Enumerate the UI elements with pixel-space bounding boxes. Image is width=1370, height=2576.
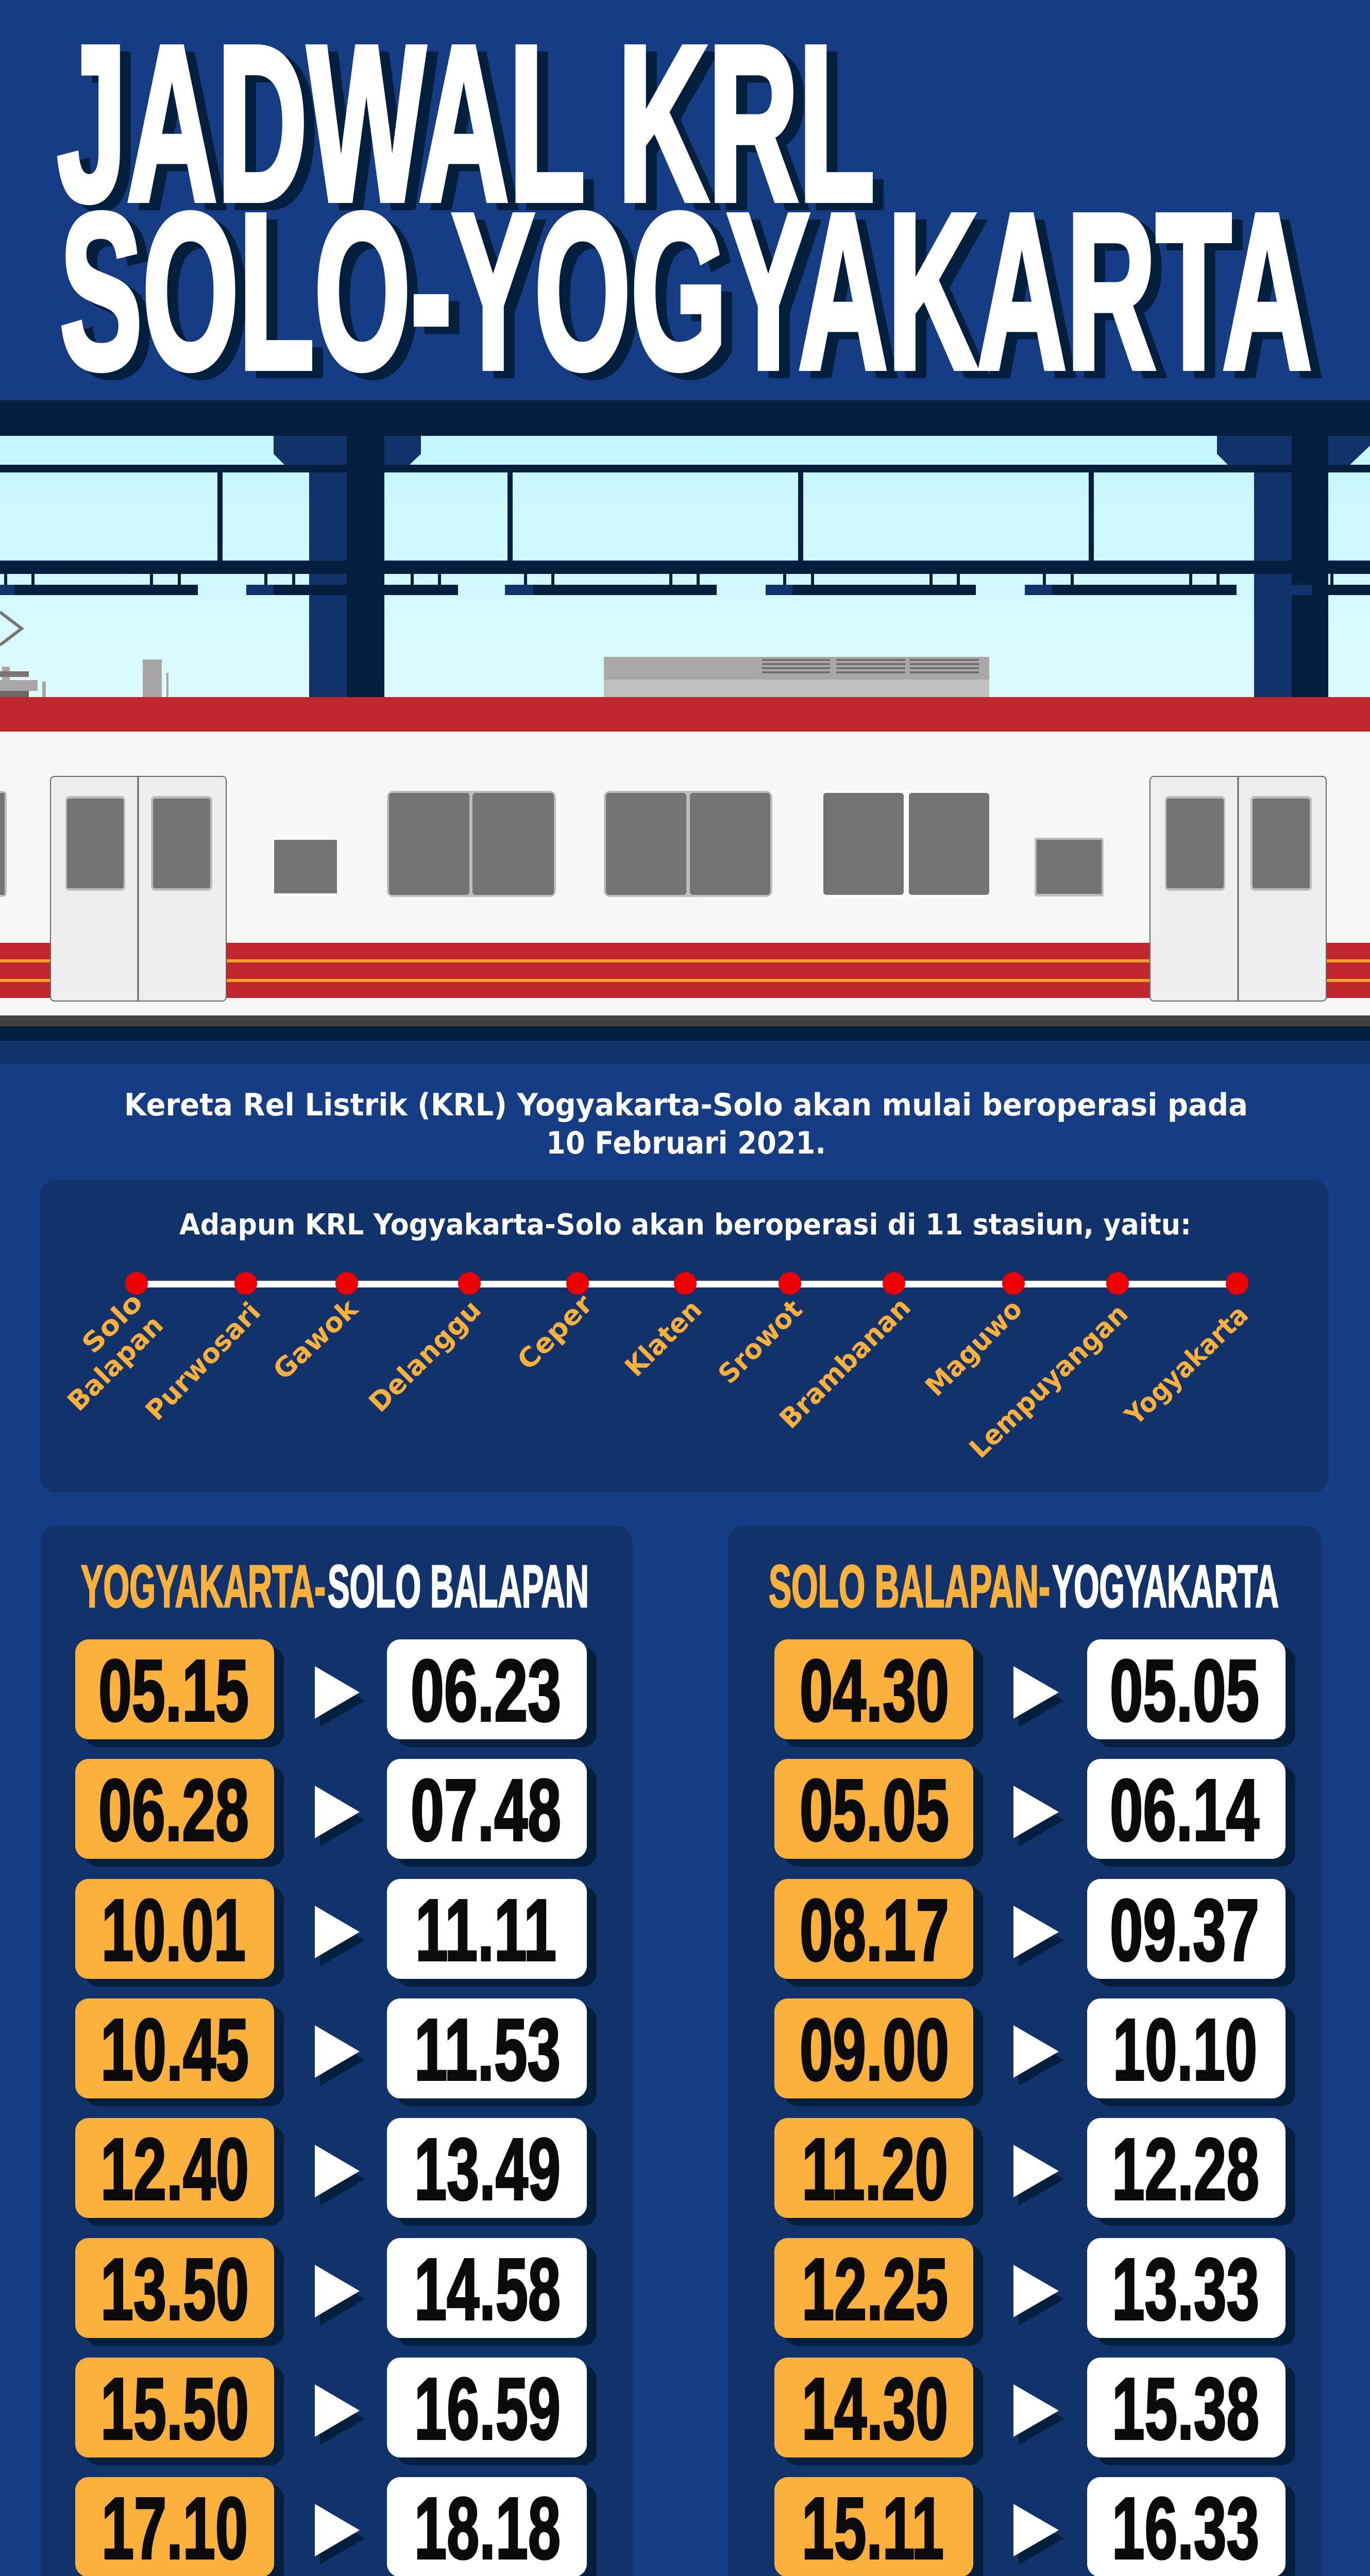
- panel: Yogyakarta to Solo Balapan: [41, 1526, 633, 2576]
- train body: [0, 697, 1370, 1063]
- panel: stations: [40, 1180, 1328, 1493]
- row 05.15 to 06.23: [75, 1639, 597, 1747]
- panel: Solo Balapan to Yogyakarta: [728, 1526, 1321, 2576]
- row 05.15 to 06.23: 05.15: [98, 1642, 249, 1740]
- row 15.50 to 16.59: 16.59: [414, 2360, 561, 2458]
- row 09.00 to 10.10: 09.00: [800, 2001, 949, 2099]
- row 12.40 to 13.49: 12.40: [100, 2121, 249, 2218]
- station labels: Yogyakarta: [1119, 1299, 1255, 1432]
- row 11.20 to 12.28: [774, 2118, 1295, 2226]
- row 04.30 to 05.05: [774, 1639, 1295, 1747]
- row 13.50 to 14.58: 13.50: [100, 2241, 249, 2338]
- station labels: Gawok: [267, 1293, 364, 1386]
- station dots: [125, 1272, 1248, 1295]
- background buildings: [0, 612, 989, 697]
- row 12.40 to 13.49: [75, 2118, 597, 2226]
- row 17.10 to 18.18: 17.10: [102, 2480, 248, 2576]
- row 06.28 to 07.48: 06.28: [98, 1761, 249, 1859]
- row 08.17 to 09.37: 08.17: [800, 1882, 949, 1979]
- station labels: Purwosari: [140, 1297, 267, 1427]
- row 10.45 to 11.53: 11.53: [414, 2001, 561, 2099]
- row 17.10 to 18.18: 18.18: [414, 2480, 561, 2576]
- station labels: Delanggu: [363, 1294, 487, 1418]
- row 14.30 to 15.38: 15.38: [1112, 2360, 1259, 2458]
- heading: Yogyakarta-Solo Balapan: YOGYAKARTA-: [81, 1553, 326, 1620]
- row 12.25 to 13.33: 12.25: [802, 2241, 948, 2338]
- row 13.50 to 14.58: [75, 2238, 597, 2346]
- row 08.17 to 09.37: [774, 1879, 1295, 1987]
- row 15.50 to 16.59: [75, 2358, 597, 2465]
- station labels: Ceper: [512, 1289, 599, 1376]
- columns and beams: [0, 436, 1370, 697]
- row 10.01 to 11.11: [75, 1879, 597, 1987]
- intro text: [124, 1087, 1248, 1161]
- stations heading: Adapun KRL Yogyakarta-Solo akan beroperasi di 11 stasiun, yaitu:: [179, 1208, 1191, 1242]
- row 12.25 to 13.33: 13.33: [1112, 2241, 1259, 2338]
- row 17.10 to 18.18: [75, 2477, 597, 2576]
- station labels: [62, 1287, 1255, 1464]
- row 15.11 to 16.33: [774, 2477, 1295, 2576]
- illustration: station and train: [0, 400, 1370, 1063]
- sky: [0, 436, 1370, 697]
- station labels: Maguwo: [920, 1294, 1028, 1402]
- station labels: Srowot: [713, 1294, 808, 1390]
- station labels: Klaten: [619, 1294, 708, 1383]
- row 10.01 to 11.11: 10.01: [102, 1882, 246, 1979]
- row 10.45 to 11.53: [75, 1998, 597, 2106]
- row 15.11 to 16.33: 15.11: [802, 2480, 944, 2576]
- row 10.45 to 11.53: 10.45: [100, 2001, 249, 2099]
- station labels: Brambanan: [774, 1292, 917, 1435]
- row 09.00 to 10.10: [774, 1998, 1295, 2106]
- train windows: [0, 791, 1104, 897]
- route line: [137, 1281, 1237, 1287]
- train door right: [1150, 776, 1326, 1001]
- intro text: Kereta Rel Listrik (KRL) Yogyakarta-Solo akan mulai beroperasi pada: [124, 1087, 1248, 1123]
- row 05.15 to 06.23: 06.23: [411, 1642, 561, 1740]
- heading: Yogyakarta-Solo Balapan: SOLO BALAPAN: [328, 1553, 589, 1620]
- row 10.01 to 11.11: 11.11: [415, 1882, 556, 1979]
- row 09.00 to 10.10: 10.10: [1113, 2001, 1257, 2099]
- row 04.30 to 05.05: 05.05: [1110, 1642, 1259, 1740]
- row 15.50 to 16.59: 15.50: [100, 2360, 249, 2458]
- station roof band: [0, 400, 1370, 436]
- station labels: Lempuyangan: [963, 1298, 1134, 1464]
- row 11.20 to 12.28: 11.20: [802, 2121, 948, 2218]
- row 06.28 to 07.48: 07.48: [411, 1761, 561, 1859]
- row 04.30 to 05.05: 04.30: [800, 1642, 949, 1740]
- row 14.30 to 15.38: 14.30: [802, 2360, 948, 2458]
- train door left: [50, 776, 226, 1001]
- row 06.28 to 07.48: [75, 1759, 597, 1867]
- row 05.05 to 06.14: [774, 1759, 1295, 1867]
- intro text: 10 Februari 2021.: [546, 1125, 826, 1161]
- row 12.25 to 13.33: [774, 2238, 1295, 2346]
- row 08.17 to 09.37: 09.37: [1110, 1882, 1259, 1979]
- row 05.05 to 06.14: 06.14: [1110, 1761, 1259, 1859]
- row 05.05 to 06.14: 05.05: [800, 1761, 949, 1859]
- row 13.50 to 14.58: 14.58: [414, 2241, 561, 2338]
- row 15.11 to 16.33: 16.33: [1112, 2480, 1259, 2576]
- row 12.40 to 13.49: 13.49: [414, 2121, 561, 2218]
- row 14.30 to 15.38: [774, 2358, 1295, 2465]
- title: [57, 0, 1312, 415]
- heading: Solo Balapan-Yogyakarta: SOLO BALAPAN-: [769, 1553, 1050, 1620]
- station labels: Solo: [76, 1287, 149, 1360]
- row 11.20 to 12.28: 12.28: [1112, 2121, 1259, 2218]
- station labels: Balapan: [62, 1310, 170, 1417]
